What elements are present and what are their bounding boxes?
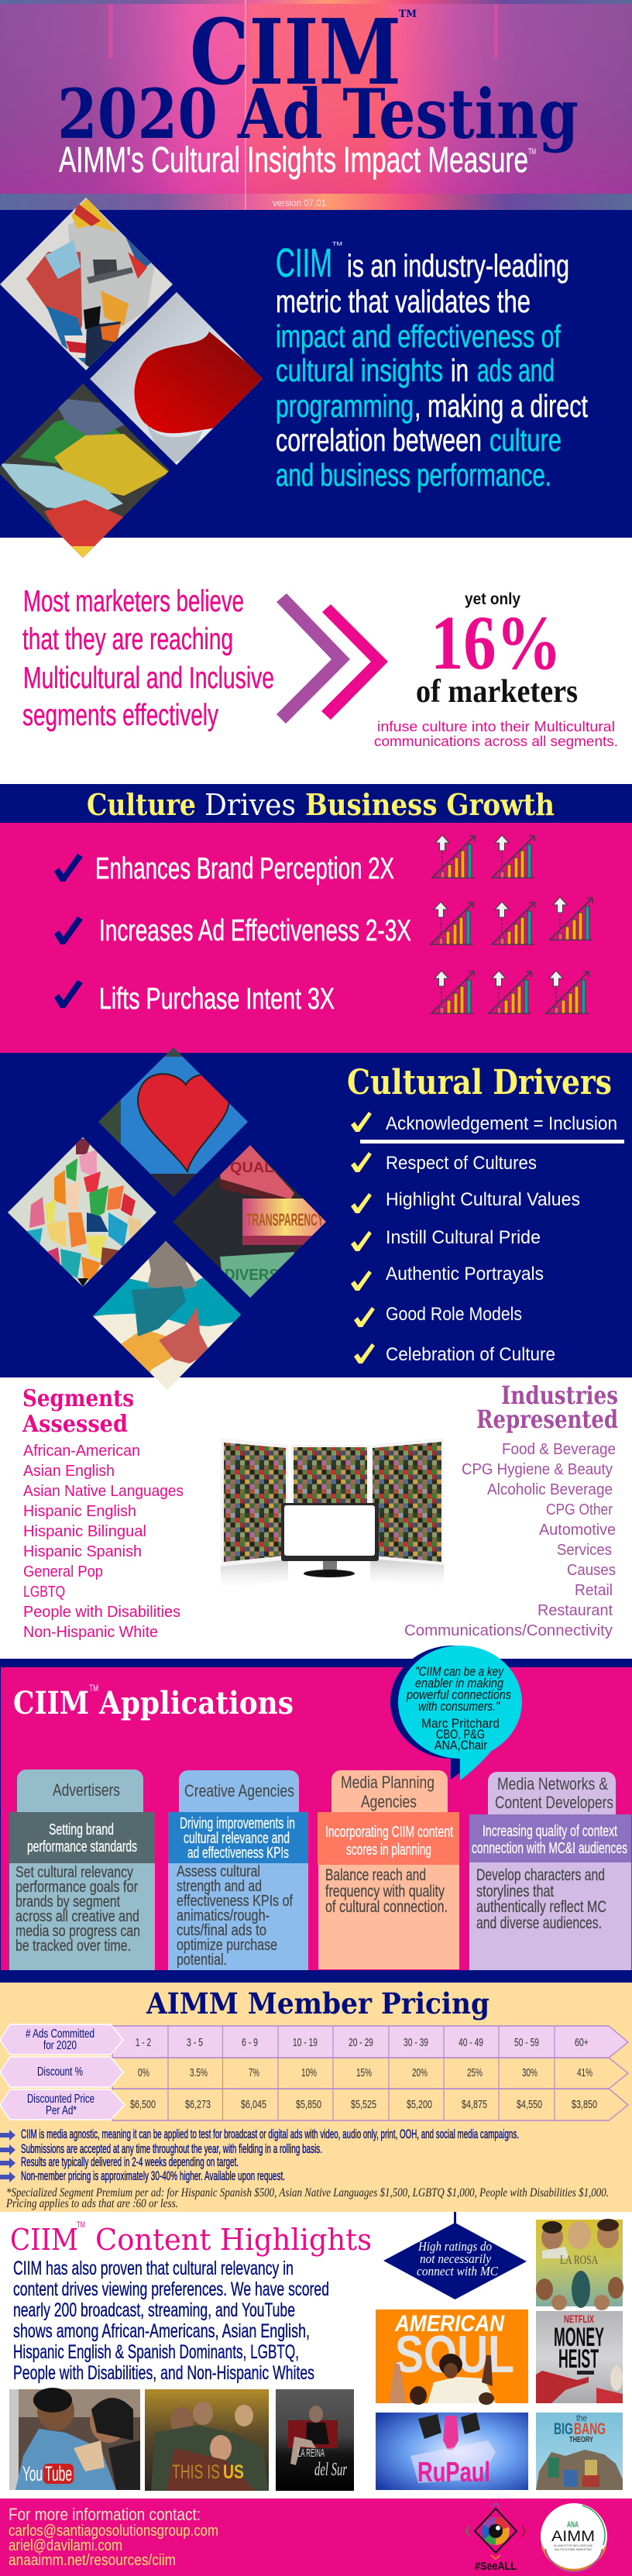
list: industries: Automotive <box>539 1522 616 1539</box>
claim text: segments effectively <box>22 699 218 732</box>
card: advertisers: performance standards <box>27 1838 137 1855</box>
photo: The Big Bang Theory: the <box>576 2413 587 2423</box>
checklist: cultural drivers <box>351 1112 624 1365</box>
photo: reaching hands diamond <box>93 1241 242 1391</box>
heading: CIIM Content Highlights: Content Highlights <box>95 2223 372 2257</box>
intro text: metric that validates the <box>276 284 531 319</box>
benefit: brand perception <box>54 835 534 886</box>
list: segments: Hispanic Spanish <box>23 1543 142 1560</box>
trademark: TM <box>399 9 417 20</box>
footnote: Pricing applies to ads that are :60 or less. <box>5 2197 178 2210</box>
statistic 16%: yet only <box>465 590 520 608</box>
card: media planning agencies: Incorporating CIIM content <box>325 1824 453 1841</box>
row: discount: 7% <box>249 2066 259 2079</box>
panel: CIIM content highlights <box>9 2212 623 2491</box>
photo: La Reina del Sur: LA REINA <box>297 2447 325 2460</box>
card: creative agencies: effectiveness KPIs of <box>177 1893 293 1910</box>
card: creative agencies: animatics/rough- <box>177 1907 270 1924</box>
notes with arrows: Submissions are accepted at any time throughout the year, with fielding in a rolling basis. <box>21 2141 322 2156</box>
subtitle trademark: TM <box>528 147 536 156</box>
photo: La Reina del Sur: del Sur <box>314 2460 347 2480</box>
row: discounted price: $5,850 <box>296 2098 321 2111</box>
checklist: cultural drivers: Acknowledgement = Inclusion <box>386 1113 617 1134</box>
claim text: Most marketers believe <box>23 585 244 618</box>
contact details: carlos@santiagosolutionsgroup.com <box>9 2523 218 2540</box>
photo: This Is Us: US <box>223 2461 244 2483</box>
heading: Segments Assessed: Segments <box>22 1385 134 1412</box>
contact details <box>9 2505 218 2569</box>
heading: CIIM Content Highlights: CIIM <box>10 2223 78 2257</box>
panel: CIIM applications <box>0 1646 632 1983</box>
row: discounted price: $3,850 <box>572 2098 597 2111</box>
photo: La Rosa de Guadalupe: LA ROSA <box>560 2254 598 2267</box>
list: industries: CPG Other <box>546 1501 613 1518</box>
list: industries: Services <box>557 1542 612 1559</box>
heading: CIIM Applications: TM <box>89 1683 98 1694</box>
notes with arrows: Results are typically delivered in 2-4 weeks depending on target. <box>21 2155 239 2169</box>
row: ads committed: 50 - 59 <box>514 2036 539 2049</box>
card: creative agencies: Driving improvements in <box>180 1815 295 1832</box>
row: discount: 10% <box>301 2066 317 2079</box>
list: segments: Non-Hispanic White <box>23 1624 158 1641</box>
callout: quote bubble: ANA,Chair <box>434 1738 487 1752</box>
heading band: Culture Drives Business Growth: Culture <box>87 787 196 822</box>
callout: ratings diamond: High ratings do <box>417 2239 492 2254</box>
logo: AIMM: MULTICULTURAL MARKETING <box>555 2547 592 2551</box>
title: CIIM: CIIM <box>190 0 401 105</box>
photo: La Reina del Sur <box>276 2389 354 2491</box>
photo: values blocks diamond: DIVERS <box>225 1267 279 1284</box>
statistic 16%: communications across all segments. <box>374 734 618 749</box>
row: ads committed: 10 - 19 <box>293 2036 318 2049</box>
row: ads committed: 20 - 29 <box>349 2036 373 2049</box>
card: creative agencies <box>168 1770 308 1970</box>
benefit: ad effectiveness <box>54 897 592 948</box>
contact details: ariel@davilami.com <box>9 2537 122 2554</box>
intro text: correlation between <box>276 422 482 458</box>
paragraph: content drives viewing preferences. We have scored <box>13 2279 329 2300</box>
heading: AIMM Member Pricing: AIMM Member Pricing <box>146 1986 489 2021</box>
intro text: culture <box>489 422 562 458</box>
photo: diamond tip below navy panel <box>63 538 103 558</box>
callout: quote bubble: "CIIM can be a key <box>415 1664 504 1679</box>
benefit: ad effectiveness: Increases Ad Effectiveness 2-3X <box>99 914 411 948</box>
row: ads committed: 40 - 49 <box>459 2036 483 2049</box>
photo: The Big Bang Theory <box>536 2413 623 2490</box>
callout: quote bubble: Marc Pritchard <box>421 1716 500 1731</box>
card: creative agencies: Creative Agencies <box>184 1781 294 1800</box>
row: discounted price: $4,550 <box>517 2098 542 2111</box>
photo: mosaic diamond <box>8 1137 158 1288</box>
row: discounted price: $5,200 <box>407 2098 432 2111</box>
list: segments: General Pop <box>23 1563 103 1580</box>
callout: ratings diamond <box>383 2223 527 2299</box>
photo: graffiti face diamond <box>0 198 173 371</box>
heading: CIIM Content Highlights: TM <box>77 2220 85 2230</box>
photo: Money Heist <box>536 2311 623 2403</box>
row: ads committed: 6 - 9 <box>242 2036 258 2049</box>
photo: This Is Us <box>145 2389 269 2491</box>
list: industries: Alcoholic Beverage <box>487 1481 613 1498</box>
card: media planning agencies: frequency with quality <box>325 1883 445 1900</box>
photo: American Soul: AMERICAN <box>394 2311 505 2337</box>
card: creative agencies: Assess cultural <box>177 1863 260 1880</box>
card: advertisers: performance goals for <box>15 1879 138 1896</box>
checklist: cultural drivers: Highlight Cultural Values <box>386 1189 580 1210</box>
statistic 16%: of marketers <box>416 674 578 710</box>
paragraph <box>13 2258 329 2384</box>
photo: The Big Bang Theory: THEORY <box>569 2436 593 2444</box>
panel: segments assessed <box>22 1385 184 1641</box>
logo: AIMM: ALLIANCE FOR INCLUSIVE AND <box>554 2543 592 2547</box>
panel: AIMM member pricing <box>0 1983 632 2212</box>
heading: CIIM Applications: CIIM <box>13 1685 89 1721</box>
photo: painted hands diamond <box>0 383 170 559</box>
callout: quote bubble <box>390 1646 522 1780</box>
photo: American Soul: SOUL <box>395 2325 514 2384</box>
row: discounted price: $4,875 <box>462 2098 487 2111</box>
list: industries: Food & Beverage <box>502 1441 616 1458</box>
checklist: cultural drivers: Respect of Cultures <box>386 1153 537 1174</box>
claim text: Multicultural and Inclusive <box>23 662 274 695</box>
panel: header banner <box>0 0 632 210</box>
arrow: double chevron <box>276 593 388 724</box>
row: discounted price: $6,273 <box>185 2098 211 2111</box>
list: segments: LGBTQ <box>23 1584 65 1601</box>
callout: ratings diamond: connect with MC <box>417 2264 499 2279</box>
photo: YouTube couple: Tube <box>45 2462 72 2485</box>
list: industries: Restaurant <box>538 1602 613 1619</box>
row: discount <box>138 2066 592 2079</box>
card: media planning agencies <box>318 1770 459 1969</box>
row: discounted price: $6,045 <box>241 2098 266 2111</box>
pricing table <box>0 2024 628 2120</box>
row: ads committed: 30 - 39 <box>404 2036 428 2049</box>
row: discount: 25% <box>467 2066 483 2079</box>
claim text: that they are reaching <box>22 623 233 656</box>
row: ads committed: 60+ <box>575 2036 589 2049</box>
card: advertisers: be tracked over time. <box>15 1938 131 1955</box>
paragraph: shows among African-Americans, Asian English, <box>13 2320 310 2342</box>
list: segments: Hispanic English <box>23 1503 136 1520</box>
list: industries <box>404 1441 616 1639</box>
contact details: For more information contact: <box>9 2505 201 2524</box>
statistic 16%: infuse culture into their Multicultural <box>377 719 615 734</box>
panel: CIIM definition <box>0 198 632 559</box>
list: industries: Retail <box>575 1582 613 1599</box>
heading band: Culture Drives Business Growth: Drives <box>204 788 296 822</box>
row: discounted price: $6,500 <box>130 2098 156 2111</box>
logo: AIMM: ANA <box>567 2520 579 2530</box>
photo: The Big Bang Theory: BIG <box>554 2420 573 2438</box>
photo: heart mural diamond <box>98 1047 249 1198</box>
list: segments: African-American <box>23 1443 140 1460</box>
paragraph: Hispanic English & Spanish Dominants, LGBTQ, <box>13 2341 299 2363</box>
photo: red heart diamond <box>90 292 267 466</box>
intro text: ads and <box>477 353 555 388</box>
intro text: programming <box>276 388 414 424</box>
paragraph: CIIM has also proven that cultural relevancy in <box>13 2258 294 2279</box>
paragraph: People with Disabilities, and Non-Hispanic Whites <box>13 2362 314 2384</box>
row: ads committed <box>136 2036 589 2049</box>
card: media networks and content developers: storylines that <box>476 1883 554 1900</box>
card: creative agencies: optimize purchase <box>177 1937 277 1954</box>
photo: RuPaul's Drag Race <box>376 2413 528 2490</box>
card: media planning agencies: Agencies <box>361 1792 417 1811</box>
photo: YouTube couple: You <box>22 2462 43 2485</box>
panel: business growth benefits <box>0 823 632 1053</box>
statistic 16% <box>374 590 618 749</box>
statistic 16%: 16% <box>431 600 562 686</box>
heading: CIIM Applications: Applications <box>98 1685 294 1721</box>
row headers <box>0 2024 125 2120</box>
panel: contact footer <box>0 2499 632 2576</box>
row headers: Per Ad* <box>46 2104 77 2117</box>
connector line <box>454 2212 456 2223</box>
card: advertisers: media so progress can <box>15 1923 140 1940</box>
row: discount: 30% <box>522 2066 538 2079</box>
card: advertisers: Set cultural relevancy <box>15 1864 133 1881</box>
photo: This Is Us: THIS IS <box>172 2461 220 2483</box>
callout: quote bubble: enabler in making <box>415 1676 503 1690</box>
list: segments: Asian Native Languages <box>23 1483 184 1500</box>
row headers: for 2020 <box>43 2039 77 2052</box>
row: discount: 3.5% <box>190 2066 208 2079</box>
callout: quote bubble: powerful connections <box>406 1687 511 1702</box>
list: segments: Asian English <box>23 1463 115 1480</box>
illustration: monitor with collage walls <box>221 1438 444 1588</box>
list: segments: People with Disabilities <box>23 1604 180 1621</box>
intro text: CIIM <box>276 241 332 286</box>
card: creative agencies: potential. <box>177 1952 227 1969</box>
card: media planning agencies: scores in planning <box>346 1842 431 1859</box>
benefit: purchase intent: Lifts Purchase Intent 3X <box>99 982 335 1016</box>
benefit: brand perception: Enhances Brand Perception 2X <box>95 852 394 886</box>
intro text: TM <box>332 242 342 247</box>
heading band: Culture Drives Business Growth: Business Growth <box>305 787 555 822</box>
card: advertisers: Setting brand <box>49 1821 114 1838</box>
callout: ratings diamond: not necessarily <box>420 2251 491 2266</box>
photo: values blocks diamond: QUALI <box>230 1160 278 1175</box>
photo: Money Heist: NETFLIX <box>564 2313 594 2325</box>
row: discount: 41% <box>577 2066 592 2079</box>
photo: RuPaul's Drag Race: RuPaul <box>417 2456 490 2488</box>
intro text: cultural insights <box>276 353 443 388</box>
card: advertisers <box>9 1769 155 1970</box>
photo: hands diamond tip below navy panel <box>155 1377 180 1390</box>
claim text <box>22 585 274 732</box>
photo: The Big Bang Theory: BANG <box>574 2420 606 2438</box>
panel: cultural drivers <box>0 1047 632 1391</box>
checklist: cultural drivers: Authentic Portrayals <box>386 1264 544 1285</box>
row: discounted price: $5,525 <box>351 2098 376 2111</box>
notes with arrows <box>0 2127 519 2183</box>
row: discount: 20% <box>412 2066 428 2079</box>
checklist: cultural drivers: Good Role Models <box>386 1304 522 1325</box>
list: industries: Communications/Connectivity <box>404 1622 613 1639</box>
notes with arrows: Non-member pricing is approximately 30-40% higher. Available upon request. <box>21 2168 285 2183</box>
version: version 07.01 <box>273 198 326 208</box>
panel: segments assessed: Assessed <box>22 1411 128 1438</box>
logo: AIMM <box>541 2503 607 2571</box>
card: media planning agencies: of cultural connection. <box>325 1898 448 1916</box>
panel: marketers statistic <box>22 585 618 749</box>
row headers: # Ads Committed <box>26 2027 94 2041</box>
intro text <box>276 241 588 493</box>
footnote <box>5 2186 609 2210</box>
row: discounted price <box>130 2098 597 2111</box>
row: discount: 0% <box>138 2066 149 2079</box>
logo: SeeALL eye <box>466 2503 525 2573</box>
panel: industries represented <box>404 1381 618 1639</box>
list: segments: Hispanic Bilingual <box>23 1523 146 1540</box>
card: media planning agencies: Balance reach and <box>325 1866 426 1884</box>
card: advertisers: Advertisers <box>53 1780 120 1800</box>
checklist: cultural drivers: Instill Cultural Pride <box>386 1227 541 1248</box>
list: industries: Causes <box>567 1562 616 1579</box>
heading band: Culture Drives Business Growth <box>0 784 632 823</box>
photo: American Soul <box>376 2309 528 2405</box>
callout: quote bubble: with consumers." <box>418 1699 500 1714</box>
row: discount: 15% <box>356 2066 372 2079</box>
checklist: cultural drivers: Celebration of Culture <box>386 1344 555 1365</box>
photo: values blocks diamond: TRANSPARENCY <box>246 1210 324 1230</box>
card: creative agencies: ad effectiveness KPIs <box>187 1845 289 1862</box>
paragraph: nearly 200 broadcast, streaming, and YouTube <box>13 2299 295 2321</box>
row: ads committed: 1 - 2 <box>136 2036 151 2049</box>
card: media planning agencies: Media Planning <box>341 1773 434 1792</box>
card: creative agencies: cultural relevance and <box>184 1830 290 1847</box>
contact details: anaaimm.net/resources/ciim <box>9 2552 176 2569</box>
card: creative agencies: cuts/final ads to <box>177 1922 266 1939</box>
benefit: purchase intent <box>54 971 589 1016</box>
card: advertisers: brands by segment <box>15 1893 120 1911</box>
list: industries: CPG Hygiene & Beauty <box>462 1461 613 1478</box>
list: segments <box>23 1443 184 1641</box>
logo: AIMM: AIMM <box>551 2529 595 2545</box>
card: media networks and content developers <box>469 1772 631 1970</box>
photo: La Rosa de Guadalupe <box>536 2219 623 2310</box>
row headers: Discount % <box>37 2065 83 2079</box>
card: media networks and content developers: Media Networks & <box>497 1774 608 1794</box>
photo: YouTube couple <box>9 2388 140 2490</box>
intro text: in <box>451 353 469 388</box>
heading: CIIM Applications <box>13 1683 294 1721</box>
callout: quote bubble: CBO, P&G <box>436 1727 485 1742</box>
photo: values blocks diamond <box>173 1145 328 1302</box>
card: advertisers: across all creative and <box>15 1908 139 1925</box>
row headers: Discounted Price <box>27 2093 94 2106</box>
row: ads committed: 3 - 5 <box>187 2036 203 2049</box>
logo: SeeALL eye: #SeeALL <box>475 2560 517 2573</box>
card: creative agencies: strength and ad <box>177 1878 262 1895</box>
